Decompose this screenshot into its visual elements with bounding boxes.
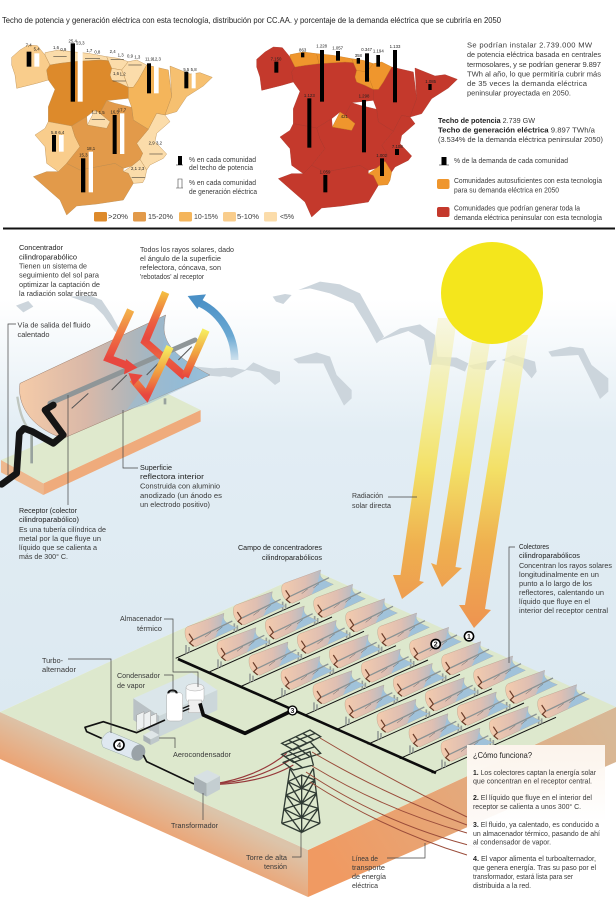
map: renewable ceiling by region: 11,9 [145, 57, 154, 62]
row three [185, 613, 493, 768]
divider rule [3, 228, 615, 230]
label: collectors: longitudinalmente en un [519, 570, 599, 579]
feed lines [176, 603, 556, 773]
map: renewable ceiling by region: 5,8 [191, 67, 197, 72]
map: renewable ceiling by region: 2,3 [138, 166, 145, 171]
high voltage feed [213, 753, 293, 785]
map: renewable ceiling by region: 17,7 [118, 108, 127, 113]
map: share of demand covered by region: 1.298 [359, 94, 370, 99]
map: renewable ceiling by region: 1,2 [120, 72, 126, 77]
receiver tube [50, 340, 195, 403]
label: steam condenser: de vapor [117, 681, 145, 690]
map: renewable ceiling by region: 1,5 [99, 110, 105, 115]
condenser cylinder [167, 690, 183, 721]
row one [282, 570, 589, 725]
label: collectors: cilindroparabólicos [519, 551, 580, 560]
label: collectors: reflectores, calentando un [519, 588, 604, 597]
label: high tension tower: Torre de alta [246, 853, 288, 862]
main collector pipe [178, 659, 436, 773]
platform base [1, 392, 201, 495]
black outlet pipe [2, 405, 63, 484]
label: interior reflective surface: Superficie [140, 463, 172, 472]
thermal storage tank [183, 684, 204, 713]
sun [441, 242, 543, 344]
badge two: 2 [434, 642, 438, 649]
text: installation potential: peninsular proyectada en 2050. [467, 88, 571, 98]
text: how it works: un almacenador térmico, pasando de ahí [473, 829, 601, 838]
map: renewable ceiling by region: 5,8 [51, 130, 58, 135]
steam pipe to turbine [85, 720, 165, 738]
label: receiver: cilindroparabólico) [19, 515, 79, 524]
map: renewable ceiling by region: 5,5 [183, 67, 190, 72]
map: share of demand covered by region: 1.228 [316, 43, 328, 48]
text: how it works: receptor se calienta a unos 300° C. [473, 802, 581, 811]
legend: right map key [437, 156, 603, 222]
map: renewable ceiling by region: 1,6 [113, 71, 120, 76]
field of collectors [176, 570, 589, 773]
how it works box [467, 745, 605, 898]
label: solar rays: el ángulo de la superficie [140, 254, 221, 263]
text: how it works: 3. El fluido, ya calentado, es conducido a [473, 820, 600, 829]
soil: right face [308, 707, 616, 897]
sun beams with arrows [393, 318, 528, 628]
label: air condenser [159, 738, 231, 759]
blue return arrow [188, 294, 235, 360]
label: heated fluid outlet: Vía de salida del fluido [18, 320, 90, 330]
label: collector field [238, 543, 322, 562]
map: renewable ceiling by region: 1,3 [118, 52, 124, 57]
map: renewable ceiling by region: 1,1 [91, 109, 98, 114]
equipment boxes [137, 711, 157, 731]
map: share of demand covered by region: 1.002 [376, 153, 388, 158]
badge three: 3 [291, 708, 295, 715]
label: heated fluid outlet [8, 320, 90, 475]
map: renewable ceiling by region: 0,9 [60, 47, 67, 52]
label: high tension tower [246, 832, 301, 871]
text: how it works [473, 750, 601, 890]
label: receiver: Es una tubería cilíndrica de [19, 525, 106, 534]
map: renewable ceiling by region: 2,1 [131, 166, 138, 171]
text: ceiling totals: (3.534% de la demanda eléctrica peninsular 2050) [438, 135, 603, 144]
circle number four: 4 [117, 741, 122, 750]
label: steam condenser [117, 671, 173, 692]
label: turbo alternator: Turbo- [42, 656, 63, 665]
legend: bar keys for left map: % en cada comunidad [189, 155, 256, 164]
concentrator diagram [1, 292, 235, 495]
label: receiver: Receptor (colector [19, 506, 77, 515]
label: concentrator: cilindroparabólico [19, 252, 77, 262]
map: renewable ceiling by region: 1,7 [86, 48, 93, 53]
map: renewable ceiling by region: 23,3 [76, 41, 85, 46]
transformer [194, 770, 220, 797]
label: concentrator: la radiación solar directa [19, 289, 98, 298]
map: share of demand covered by region: 1.123 [304, 93, 315, 98]
label: solar rays: refelectora, cóncava, son [140, 263, 221, 272]
text: how it works: que concentran en el receptor central. [473, 776, 592, 786]
label: transmission line: transporte [352, 863, 385, 872]
label: receiver [19, 395, 106, 561]
badge two [431, 639, 440, 649]
cable to transformer [143, 755, 194, 784]
map: share of demand covered by region: 1.057 [332, 46, 344, 51]
badge one: 1 [467, 634, 471, 641]
label: concentrator: Tienen un sistema de [19, 262, 87, 270]
label: interior reflective surface: reflectora interior [140, 472, 205, 481]
label: interior reflective surface: un electrodo positivo) [140, 500, 210, 509]
map: renewable ceiling by region: 16,5 [110, 109, 119, 114]
label: interior reflective surface: Construida con aluminio [140, 482, 220, 490]
legend: percentage colour scale: >20% [108, 212, 128, 221]
text: how it works: transformador, estará lista para ser [473, 872, 573, 881]
sky background [0, 232, 616, 712]
legend: percentage colour scale: 10-15% [194, 212, 218, 221]
text: how it works: distribuida a la red. [473, 881, 531, 890]
label: turbo alternator: alternador [42, 665, 76, 674]
text: installation potential: TWh al año, lo que permitiría cubrir más [467, 70, 601, 78]
legend: right map key: % de la demanda de cada comunidad [454, 156, 568, 165]
map: renewable ceiling by region: 18,1 [87, 146, 96, 151]
label: concentrator: Concentrador [19, 243, 63, 252]
circle number four [114, 740, 124, 750]
row two [233, 592, 541, 747]
map: renewable ceiling by region: 7,4 [26, 42, 32, 47]
label: solar rays [140, 245, 234, 281]
map: share of demand covered by region: 1.133 [390, 44, 401, 49]
label: thermal storage: Almacenador [120, 614, 162, 623]
text: installation potential: de potencia eléctrica basada en centrales [467, 50, 601, 59]
radiation label: solar directa [352, 501, 392, 510]
label: collectors: Colectores [519, 542, 549, 551]
label: receiver: líquido que se calienta a [19, 543, 98, 552]
clouds behind concentrator [16, 296, 237, 377]
label: receiver: metal por la que fluye un [19, 534, 101, 543]
label: turbo alternator [42, 656, 111, 733]
thick pipe to junction [200, 703, 290, 733]
map: share of demand covered by region: 863 [299, 48, 307, 53]
text: installation potential: termosolares, y se podrían generar 9.897 [467, 60, 601, 69]
red reflected rays [108, 292, 206, 396]
label: thermal storage [120, 614, 198, 687]
label: solar rays: Todos los rayos solares, dado [140, 245, 234, 254]
label: collector field: cilindroparabólicos [262, 553, 322, 562]
label: transmission line [352, 843, 425, 890]
map: renewable ceiling by region [12, 38, 212, 215]
radiation label [352, 491, 417, 510]
map: share of demand covered by region: 1.194 [373, 48, 384, 53]
text: installation potential: de 35 veces la demanda eléctrica [467, 79, 588, 88]
parabolic trough [17, 315, 210, 438]
badge one [464, 632, 474, 641]
map: share of demand covered by region: 1.085 [425, 79, 437, 84]
map: renewable ceiling by region: 2,9 [149, 140, 155, 145]
legend: bar keys for left map: de generación eléctrica [189, 187, 258, 196]
text: ceiling totals [438, 116, 603, 144]
soil: left face [0, 712, 308, 897]
map: renewable ceiling by region: 25,4 [68, 38, 77, 43]
text: how it works: 4. El vapor alimenta el turboalternador, [473, 854, 596, 863]
number badges on field [288, 632, 474, 715]
map: share of demand covered by region: 421 [341, 114, 349, 119]
map: renewable ceiling by region: 1,6 [53, 45, 60, 50]
legend: percentage colour scale: <5% [280, 212, 294, 221]
label: collectors [509, 542, 612, 663]
map: renewable ceiling by region: 3,2 [156, 140, 163, 145]
label: high tension tower: tensión [264, 862, 287, 871]
map: renewable ceiling by region: 15,3 [79, 153, 88, 158]
map: share of demand covered by region: 7.150 [271, 57, 282, 62]
building [133, 673, 217, 737]
label: concentrator [19, 243, 100, 298]
air condenser [143, 731, 159, 745]
legend: bar keys for left map: del techo de potencia [189, 163, 254, 172]
map: share of demand covered by region [257, 43, 457, 217]
clouds [220, 282, 608, 406]
legend: percentage colour scale: 5-10% [237, 212, 259, 221]
label: collectors: interior del receptor central [519, 606, 608, 615]
label: collector field: Campo de concentradores [238, 543, 322, 552]
text: how it works: que genera energía. Tras su paso por el [473, 863, 596, 872]
label: interior reflective surface [123, 410, 222, 509]
label: transformer: Transformador [171, 821, 218, 830]
label: collectors: líquido que fluye en el [519, 597, 590, 606]
map: share of demand covered by region: 7.108 [392, 144, 403, 149]
label: air condenser: Aerocondensador [173, 750, 231, 759]
legend: bar keys for left map: % en cada comunidad [189, 178, 256, 187]
text: installation potential: Se podrían instalar 2.739.000 MW [467, 40, 593, 50]
label: transmission line: de energía [352, 872, 387, 881]
power plant [85, 673, 293, 797]
power lines [306, 738, 480, 855]
map: renewable ceiling by region: 0,9 [127, 53, 134, 58]
text: how it works: 2. El líquido que fluye en el interior del [473, 793, 592, 802]
turbo alternator [102, 732, 148, 763]
map: renewable ceiling by region: 0,8 [94, 49, 101, 54]
label: heated fluid outlet: calentado [18, 330, 50, 339]
text: how it works: al condensador de vapor. [473, 838, 551, 846]
transmission tower [282, 730, 321, 832]
legend: right map key: para su demanda eléctrica en 2050 [454, 186, 559, 194]
label: concentrator: optimizar la captación de [19, 280, 100, 289]
text: how it works: 1. Los colectores captan la energía solar [473, 768, 596, 777]
field surface [0, 573, 616, 850]
map: renewable ceiling by region: 6,4 [58, 130, 65, 135]
label: steam condenser: Condensador [117, 671, 160, 680]
map: renewable ceiling by region: 5,4 [34, 47, 40, 52]
legend: bar keys for left map [176, 155, 258, 196]
map: share of demand covered by region: 358 [355, 53, 363, 58]
map: renewable ceiling by region: 12,3 [152, 57, 161, 62]
text: ceiling totals: Techo de potencia 2.739 GW [438, 116, 536, 125]
radiation label: Radiación [352, 491, 383, 500]
map: share of demand covered by region: 1.059 [320, 170, 331, 175]
map: share of demand covered by region: 0.347 [361, 47, 373, 52]
label: collectors: Concentran los rayos solares [519, 561, 612, 570]
label: concentrator: seguimiento del sol para [19, 270, 100, 280]
map: renewable ceiling by region: 2,4 [110, 49, 116, 54]
text: how it works: ¿Cómo funciona? [473, 750, 532, 760]
legend: right map key: Comunidades que podrían generar toda la [454, 204, 581, 212]
label: transformer [171, 793, 218, 830]
label: interior reflective surface: anodizado (un ánodo es [140, 491, 222, 500]
text: installation potential [467, 40, 601, 98]
legend: percentage colour scale: 15-20% [148, 212, 173, 221]
title: Techo de potencia y generación eléctrica con esta tecnología, distribución por CC.AA. y porcentaje de la demanda eléctrica que se cubriría en 2050 [2, 15, 501, 25]
label: transmission line: eléctrica [352, 881, 379, 890]
legend: percentage colour scale [94, 212, 294, 222]
ground plane [0, 573, 616, 897]
text: ceiling totals: Techo de generación eléctrica 9.897 TWh/a [438, 126, 596, 134]
badge three [288, 706, 297, 715]
label: transmission line: Línea de [352, 854, 378, 863]
label: thermal storage: térmico [137, 624, 162, 633]
label: receiver: más de 300° C. [19, 552, 68, 561]
label: solar rays: 'rebotados' al receptor [140, 272, 204, 281]
map: renewable ceiling by region: 1,3 [134, 55, 141, 60]
label: collectors: punto a lo largo de los [519, 579, 592, 588]
